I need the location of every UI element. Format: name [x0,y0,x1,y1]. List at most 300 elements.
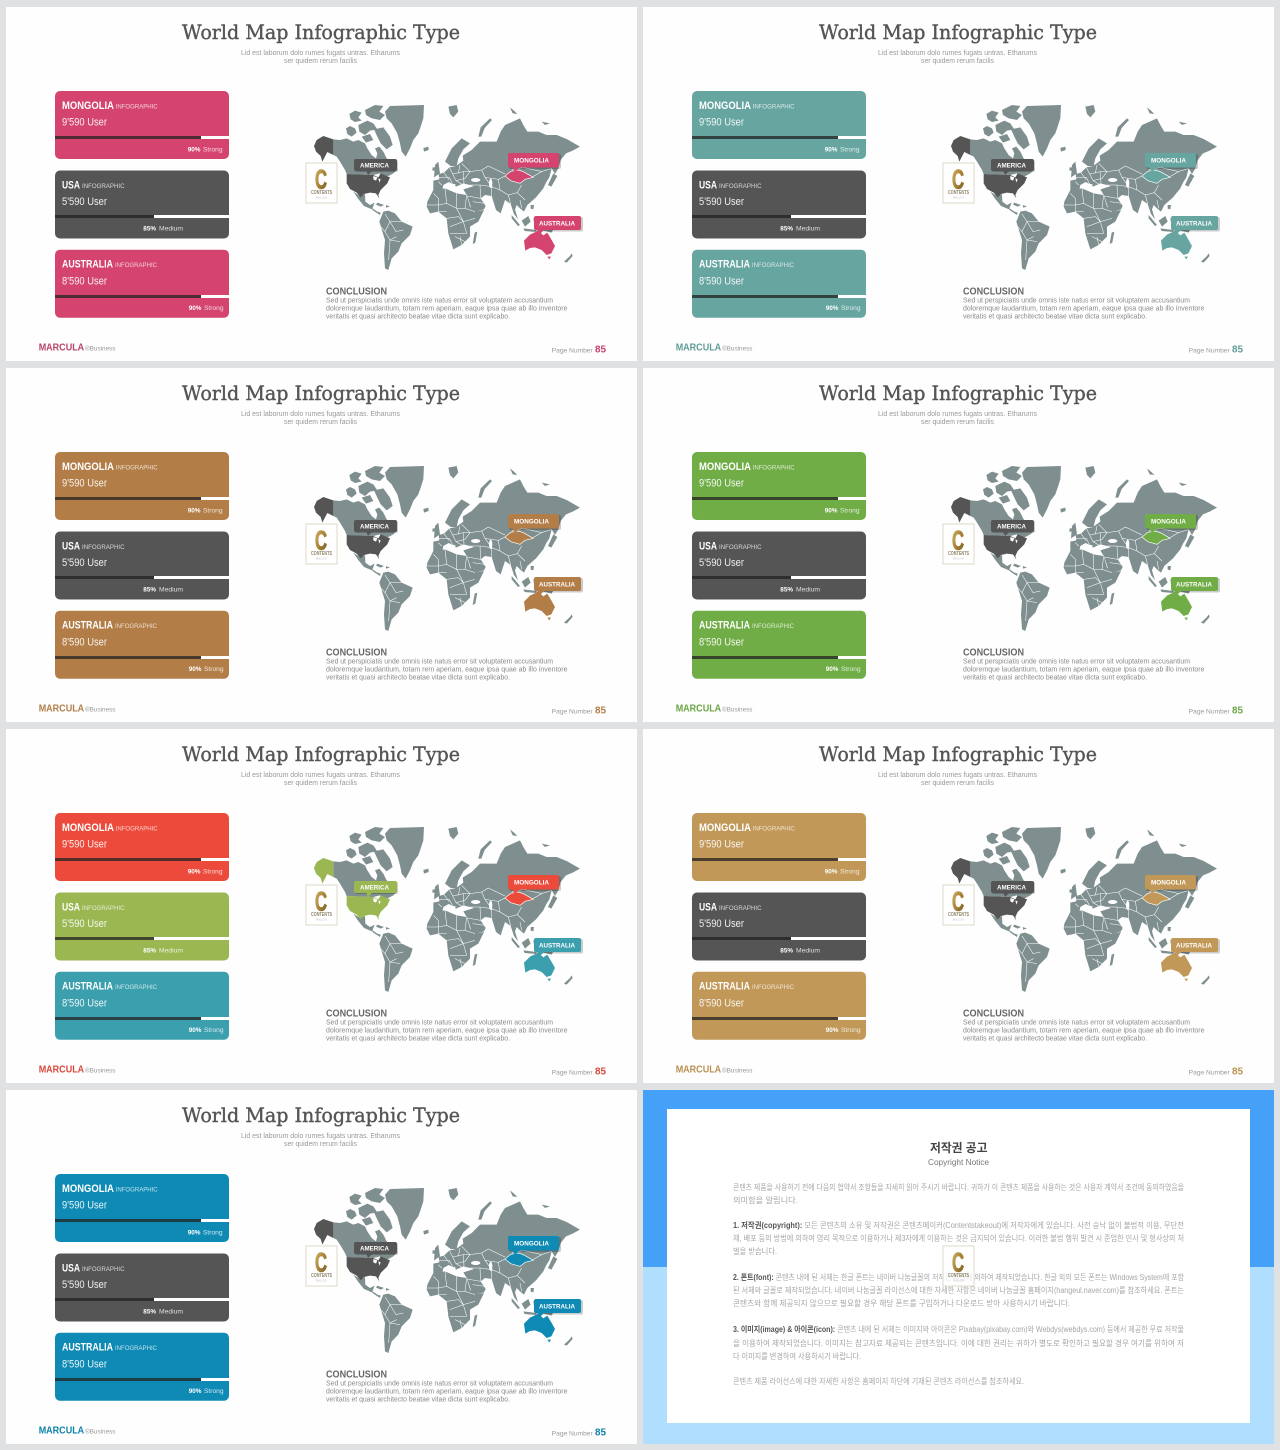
card: Mongolia: 90% [825,146,838,153]
card: Australia: 90% [826,305,839,312]
subtitle [241,1133,400,1148]
card: Mongolia: 90% [188,868,201,875]
footer brand: ®Business [722,1067,753,1075]
card: Mongolia: Strong [840,146,860,153]
conclusion: doloremque laudantium, totam rem aperiam, eaque ipsa quae ab illo inventore [963,667,1205,674]
card: Australia: AUSTRALIA [62,1342,113,1354]
label: Mongolia: MONGOLIA [1151,518,1186,526]
logo watermark: CONTENTS [311,1273,333,1279]
slide 6: tan [643,729,1274,1083]
card: Mongolia: 9'590 User [62,1200,107,1212]
logo watermark: REAL LOOK [953,196,964,200]
subtitle: ser quidem rerum facilis [284,419,357,426]
card: USA: 5'590 User [699,557,744,569]
card: Mongolia [55,1174,229,1242]
conclusion: doloremque laudantium, totam rem aperiam, eaque ipsa quae ab illo inventore [963,306,1205,313]
label: Mongolia [508,875,561,894]
card: Mongolia: 9'590 User [699,838,744,850]
page number: 85 [595,343,606,355]
card: Mongolia: Strong [203,507,223,514]
card: Mongolia: 90% [188,507,201,514]
card: Australia: 8'590 User [62,1358,107,1370]
subtitle [241,772,400,787]
label: Australia: AUSTRALIA [539,220,575,228]
paragraph 1: 벌을 받습니다. [733,1246,777,1256]
card: Australia: INFOGRAPHIC [115,984,157,991]
conclusion: veritatis et quasi architecto beatae vitae dicta sunt explicabo. [963,1036,1147,1043]
conclusion: Sed ut perspiciatis unde omnis iste natus error sit voluptatem accusantium [326,298,553,305]
page number: 85 [595,704,606,716]
conclusion: doloremque laudantium, totam rem aperiam, eaque ipsa quae ab illo inventore [963,1028,1205,1035]
logo watermark: CONTENTS [311,190,333,196]
slide 8: copyright notice [643,1090,1274,1444]
conclusion: Sed ut perspiciatis unde omnis iste natus error sit voluptatem accusantium [963,1020,1190,1027]
card: Australia: Strong [841,1027,861,1034]
label: Australia [534,577,583,595]
notice subheading: Copyright Notice [928,1158,990,1167]
title: World Map Infographic Type [182,20,460,44]
label: Australia: AUSTRALIA [539,942,575,950]
subtitle: ser quidem rerum facilis [921,419,994,426]
card: USA: 85% [780,948,793,954]
card: Australia: 90% [189,1388,202,1395]
card: Mongolia: MONGOLIA [699,100,751,112]
logo watermark [943,885,974,925]
page number: 85 [1232,704,1243,716]
subtitle: ser quidem rerum facilis [921,780,994,787]
label: America [991,159,1035,175]
card: Australia: AUSTRALIA [699,980,750,992]
notice heading: 저작권 공고 [930,1140,988,1155]
card: USA: USA [62,1262,80,1274]
card: USA [55,170,229,238]
slide 2: teal [643,7,1274,361]
page number [552,704,606,716]
page number [1189,343,1243,355]
conclusion: CONCLUSION [326,647,387,659]
card: Mongolia: INFOGRAPHIC [753,104,795,110]
card: Australia [692,250,866,318]
logo watermark: REAL LOOK [316,918,327,922]
footer brand [676,342,753,354]
card: Mongolia: Strong [840,507,860,514]
card: Australia: 90% [826,666,839,673]
card: Mongolia: INFOGRAPHIC [116,104,158,110]
card: Mongolia: 90% [188,1229,201,1236]
label: Australia: AUSTRALIA [539,1304,575,1310]
subtitle: ser quidem rerum facilis [284,780,357,787]
logo watermark: CONTENTS [948,1273,970,1279]
subtitle [241,411,400,426]
conclusion: veritatis et quasi architecto beatae vitae dicta sunt explicabo. [326,1397,510,1404]
footer brand: ®Business [85,706,116,714]
label: Mongolia: MONGOLIA [1151,158,1186,164]
label: Mongolia: MONGOLIA [514,880,549,886]
label: America: AMERICA [360,1246,389,1252]
logo watermark: C [952,526,964,556]
conclusion: doloremque laudantium, totam rem aperiam, eaque ipsa quae ab illo inventore [326,306,568,313]
card: Australia: 8'590 User [62,636,107,648]
subtitle: Lid est laborum dolo rumes fugats untras. Etharums [878,50,1037,57]
card: USA: 85% [780,226,793,232]
conclusion: doloremque laudantium, totam rem aperiam, eaque ipsa quae ab illo inventore [326,1389,568,1396]
page number: Page Number [552,1430,594,1437]
card: Mongolia: MONGOLIA [62,461,114,473]
conclusion: CONCLUSION [963,1008,1024,1020]
card: Australia: INFOGRAPHIC [115,1345,157,1352]
notice panel [667,1109,1250,1423]
page number: Page Number [1189,1069,1231,1076]
paragraph 1: 1. 저작권(copyright): 모든 콘텐츠의 소유 및 저작권은 콘텐츠메이커(Contentstakeout)에 저작자에게 있습니다. 사전 승낙 없이 불법적 이용, 무단전 [733,1220,1184,1230]
subtitle: Lid est laborum dolo rumes fugats untras. Etharums [241,1133,400,1140]
card: USA [692,892,866,960]
card: USA: INFOGRAPHIC [82,905,125,912]
conclusion [326,1369,568,1404]
conclusion: CONCLUSION [963,647,1024,659]
card: Mongolia [55,813,229,881]
card: Australia: AUSTRALIA [699,258,750,270]
card: USA [692,170,866,238]
card: USA: 85% [143,948,156,954]
card: Australia: 90% [189,666,202,673]
card: Mongolia: 90% [188,146,201,153]
title: World Map Infographic Type [819,742,1097,766]
card: Australia: Strong [204,1388,224,1395]
label: America: AMERICA [360,884,389,892]
footer brand: ®Business [722,706,753,714]
logo watermark [306,1246,337,1286]
card: USA: 85% [780,586,793,594]
footer brand: MARCULA [39,1064,85,1076]
card: Mongolia: MONGOLIA [699,822,751,834]
page number: 85 [595,1426,606,1438]
card: USA [55,892,229,960]
intro paragraph: 의미함을 알립니다. [733,1195,798,1205]
card: Australia: 8'590 User [62,276,107,288]
card: Australia: INFOGRAPHIC [752,262,794,269]
card: USA: Medium [796,586,820,594]
conclusion: doloremque laudantium, totam rem aperiam, eaque ipsa quae ab illo inventore [326,667,568,674]
conclusion: veritatis et quasi architecto beatae vitae dicta sunt explicabo. [326,314,510,321]
card: USA [55,532,229,600]
card: USA: 85% [143,586,156,594]
title: World Map Infographic Type [182,381,460,405]
paragraph 1: 재, 배포 등의 방법에 의하여 영리 목적으로 이용하거나 제3자에게 이용하는 것은 금지되어 있습니다. 이러한 불법 행위 발견 시 준엄한 민사 및 형사상의 처 [733,1233,1184,1243]
card: Mongolia: 9'590 User [62,478,107,490]
label: Mongolia: MONGOLIA [514,1240,549,1248]
logo watermark: C [315,1248,327,1278]
footer brand [39,703,116,715]
slide 5: multicolour [6,729,637,1083]
label: Mongolia [1145,514,1198,533]
card: USA: 5'590 User [699,196,744,208]
card: Mongolia: Strong [840,868,860,875]
card: USA: INFOGRAPHIC [719,183,762,190]
card: Mongolia: 9'590 User [699,116,744,128]
logo watermark: CONTENTS [948,912,970,918]
logo watermark: REAL LOOK [953,918,964,922]
logo watermark: C [952,164,964,194]
card: Australia: INFOGRAPHIC [115,623,157,630]
page number: 85 [1232,1065,1243,1077]
card: Mongolia: MONGOLIA [62,100,114,112]
page number: Page Number [1189,347,1231,354]
label: America [991,520,1035,536]
logo watermark [306,163,337,203]
page number [1189,1065,1243,1077]
card: Australia [55,1333,229,1401]
subtitle: Lid est laborum dolo rumes fugats untras. Etharums [878,772,1037,779]
card: Australia [55,250,229,318]
logo watermark: REAL LOOK [316,196,327,200]
card: USA: INFOGRAPHIC [719,544,762,551]
card: USA: USA [699,540,717,552]
card: Australia: 90% [189,1027,202,1034]
card: Mongolia: Strong [203,1229,223,1236]
card: USA: USA [699,902,717,914]
logo watermark: REAL LOOK [316,556,327,560]
world map [314,105,580,270]
card: Mongolia: Strong [203,868,223,875]
card: USA: 5'590 User [62,557,107,569]
card: Australia: 8'590 User [62,998,107,1010]
paragraph 2 [733,1272,1185,1308]
card: Mongolia: INFOGRAPHIC [753,464,795,472]
label: America: AMERICA [360,524,389,530]
conclusion: veritatis et quasi architecto beatae vitae dicta sunt explicabo. [963,675,1147,682]
logo watermark: REAL LOOK [316,1278,327,1282]
title: World Map Infographic Type [182,1103,460,1127]
conclusion: veritatis et quasi architecto beatae vitae dicta sunt explicabo. [963,314,1147,321]
conclusion: CONCLUSION [963,286,1024,298]
card: Australia: Strong [204,1027,224,1034]
card: Australia [55,611,229,679]
card: USA: 85% [143,226,156,232]
card: Australia [692,972,866,1040]
card: USA: USA [62,180,80,192]
logo watermark: CONTENTS [948,551,970,557]
card: Mongolia: MONGOLIA [699,461,751,473]
paragraph 3: 을 이용하여 제작되었습니다. 이미지는 참고자료 제공되는 콘텐츠입니다. 이에 대한 권리는 귀하가 별도로 확인하고 필요할 경우 여기를 위하여 저 [733,1338,1184,1348]
card: Mongolia [692,452,866,520]
logo watermark [306,885,337,925]
card: USA [692,532,866,600]
conclusion: Sed ut perspiciatis unde omnis iste natus error sit voluptatem accusantium [326,1020,553,1027]
card: Mongolia: INFOGRAPHIC [116,826,158,832]
label: Mongolia [508,153,561,172]
conclusion: Sed ut perspiciatis unde omnis iste natus error sit voluptatem accusantium [326,659,553,666]
label: Australia [1171,577,1220,595]
title: World Map Infographic Type [819,381,1097,405]
label: Australia: AUSTRALIA [1176,942,1212,950]
logo watermark: CONTENTS [311,551,333,557]
label: America: AMERICA [997,524,1026,530]
footer brand: ®Business [85,1428,116,1436]
label: Mongolia: MONGOLIA [514,158,549,164]
footer brand [676,703,753,715]
label: America [354,1242,398,1258]
paragraph 1 [733,1220,1184,1256]
world map [951,466,1217,631]
conclusion [326,286,568,321]
logo watermark [306,524,337,564]
logo watermark: C [315,886,327,916]
footer brand [39,1425,116,1437]
paragraph 2: 콘텐츠와 함께 제공되지 않으므로 필요할 경우 해당 폰트를 구입하거나 다운로드 받아 사용하시기 바랍니다. [733,1298,1070,1308]
card: Australia [55,972,229,1040]
logo watermark: REAL LOOK [953,1278,964,1282]
label: Mongolia: MONGOLIA [1151,880,1186,886]
card: Mongolia: INFOGRAPHIC [116,464,158,472]
card: USA: INFOGRAPHIC [82,544,125,551]
logo watermark: C [315,164,327,194]
card: Australia: AUSTRALIA [62,620,113,632]
logo watermark: C [315,526,327,556]
conclusion: Sed ut perspiciatis unde omnis iste natus error sit voluptatem accusantium [963,298,1190,305]
label: America: AMERICA [997,884,1026,892]
label: Mongolia: MONGOLIA [514,518,549,526]
page number [1189,704,1243,716]
footer brand: MARCULA [39,703,85,715]
card: Australia: 8'590 User [699,636,744,648]
card: USA: USA [699,180,717,192]
conclusion: Sed ut perspiciatis unde omnis iste natus error sit voluptatem accusantium [326,1381,553,1388]
card: Mongolia [692,813,866,881]
slide 1: pink [6,7,637,361]
card: Australia [692,611,866,679]
intro paragraph [733,1182,1184,1205]
label: America [354,881,398,897]
label: America [354,520,398,536]
conclusion [963,647,1205,682]
card: USA: 5'590 User [62,1279,107,1291]
conclusion [963,1008,1205,1043]
label: Australia [534,938,583,956]
paragraph 3: 다 이미지를 변경하여 사용하시기 바랍니다. [733,1351,861,1361]
card: Australia: INFOGRAPHIC [752,984,794,991]
label: Mongolia [508,514,561,533]
card: Mongolia: MONGOLIA [62,1183,114,1195]
conclusion: CONCLUSION [326,1369,387,1381]
card: USA: Medium [159,948,183,954]
label: Australia [1171,938,1220,956]
footer brand: ®Business [85,1067,116,1075]
title: World Map Infographic Type [182,742,460,766]
conclusion: Sed ut perspiciatis unde omnis iste natus error sit voluptatem accusantium [963,659,1190,666]
page number: Page Number [1189,708,1231,715]
card: Australia: INFOGRAPHIC [115,262,157,269]
card: Mongolia: Strong [203,146,223,153]
label: America [991,881,1035,897]
card: Australia: 8'590 User [699,998,744,1010]
world map [314,1188,580,1353]
subtitle: Lid est laborum dolo rumes fugats untras. Etharums [878,411,1037,418]
card: Australia: INFOGRAPHIC [752,623,794,630]
logo watermark [943,524,974,564]
conclusion [963,286,1205,321]
closing line: 콘텐츠 제품 라이선스에 대한 자세한 사항은 홈페이지 하단에 기재된 콘텐츠 라이선스를 참조하세요. [733,1376,1024,1386]
card: USA: 5'590 User [62,918,107,930]
label: America: AMERICA [997,162,1026,170]
logo watermark: CONTENTS [311,912,333,918]
subtitle: Lid est laborum dolo rumes fugats untras. Etharums [241,50,400,57]
card: Australia: AUSTRALIA [62,258,113,270]
footer brand: MARCULA [676,342,722,354]
card: USA: Medium [796,226,820,232]
card: Mongolia [55,452,229,520]
card: Mongolia: 9'590 User [62,116,107,128]
slide 7: blue [6,1090,637,1444]
card: USA [55,1254,229,1322]
world map [314,466,580,631]
footer brand: ®Business [85,345,116,353]
card: Australia: 90% [826,1027,839,1034]
subtitle [878,50,1037,65]
card: Mongolia: INFOGRAPHIC [753,826,795,832]
label: Australia [1171,216,1220,234]
card: USA: Medium [159,586,183,594]
card: Australia: Strong [204,305,224,312]
card: Mongolia: 9'590 User [62,838,107,850]
subtitle [878,772,1037,787]
card: USA: USA [62,902,80,914]
page number: 85 [1232,343,1243,355]
label: Mongolia [508,1236,561,1255]
card: Mongolia: MONGOLIA [62,822,114,834]
card: Australia: Strong [841,305,861,312]
conclusion: doloremque laudantium, totam rem aperiam, eaque ipsa quae ab illo inventore [326,1028,568,1035]
logo watermark: C [952,886,964,916]
paragraph 3: 3. 이미지(image) & 아이콘(icon): 콘텐츠 내에 된 서체는 이미지와 아이콘은 Pixabay(pixabay.com)와 Webdys(webdys.com) 등에서 제공한 무료 저작물 [733,1324,1184,1334]
slide 4: green [643,368,1274,722]
world map [951,827,1217,992]
world map [951,105,1217,270]
page number: Page Number [552,708,594,715]
footer brand [676,1064,753,1076]
card: Mongolia: 9'590 User [699,478,744,490]
footer brand [39,1064,116,1076]
subtitle [241,50,400,65]
footer brand: MARCULA [676,1064,722,1076]
card: USA: 5'590 User [62,196,107,208]
label: Australia: AUSTRALIA [1176,582,1212,588]
subtitle: ser quidem rerum facilis [284,1141,357,1148]
subtitle: ser quidem rerum facilis [284,58,357,65]
card: Mongolia [692,91,866,159]
label: America [354,159,398,175]
page number: Page Number [552,347,594,354]
card: USA: Medium [159,226,183,232]
conclusion: CONCLUSION [326,1008,387,1020]
conclusion: veritatis et quasi architecto beatae vitae dicta sunt explicabo. [326,675,510,682]
paragraph 3 [733,1324,1184,1361]
page number [552,1426,606,1438]
card: Mongolia: INFOGRAPHIC [116,1186,158,1194]
footer brand: MARCULA [39,1425,85,1437]
page number: Page Number [552,1069,594,1076]
paragraph 2: 된 서체와 글꼴로 제작되었습니다. 네이버 나눔글꼴 라이선스에 대한 자세한 사항은 네이버 나눔글꼴 홈페이지(hangeul.naver.com)를 참조하세요. 폰트는 [733,1285,1184,1295]
card: Australia: 8'590 User [699,276,744,288]
logo watermark: REAL LOOK [953,556,964,560]
label: Australia: AUSTRALIA [1176,220,1212,228]
card: Australia: AUSTRALIA [699,620,750,632]
card: USA: 85% [143,1308,156,1316]
world map [314,827,580,992]
subtitle [878,411,1037,426]
conclusion: CONCLUSION [326,286,387,298]
title: World Map Infographic Type [819,20,1097,44]
label: Australia [534,216,583,234]
